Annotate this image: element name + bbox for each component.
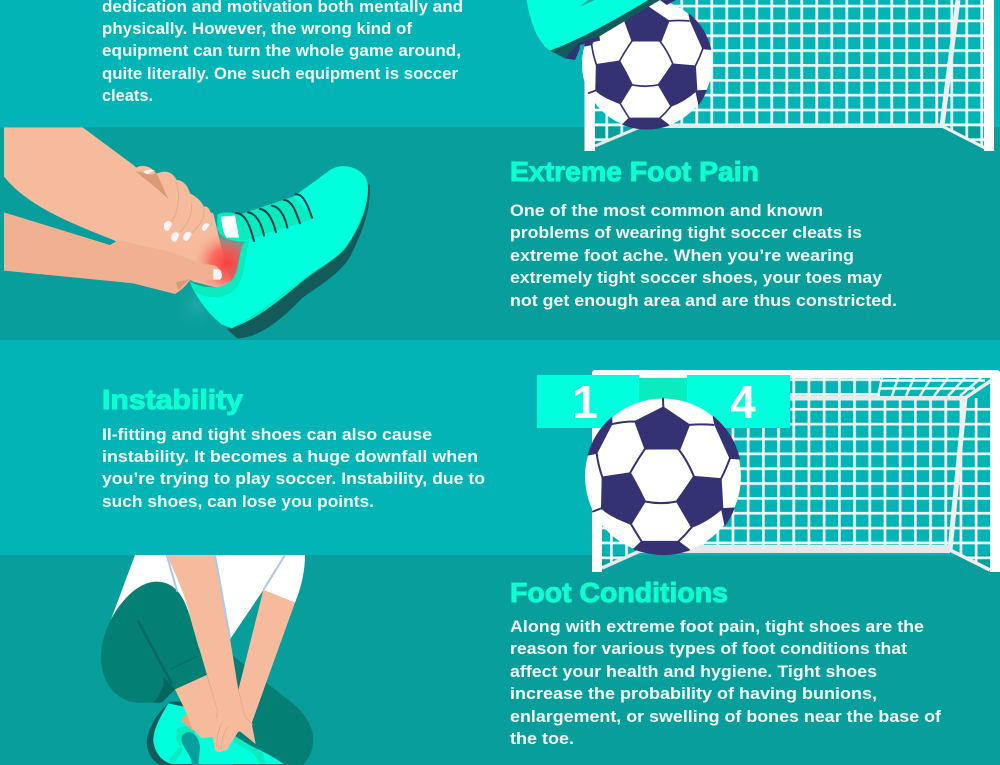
text block: instability: you’re trying to play soccer. Instability, due to [102,469,485,488]
icon: cleat kicking ball [527,0,676,60]
shoe body [189,166,368,328]
text block: extreme foot pain: not get enough area and are thus constricted. [510,291,897,310]
text block: instability: such shoes, can lose you points. [102,492,374,511]
scoreboard [537,375,790,428]
text block: extreme foot pain [510,201,897,310]
top hand fingers [155,172,212,240]
finger nails [164,221,172,231]
illustration: goal with net, middle [592,370,1000,572]
text block: intro paragraph: physically. However, the wrong kind of [102,19,412,38]
text block: foot conditions: reason for various types of foot conditions that [510,639,907,658]
text block: extreme foot pain: extremely tight soccer shoes, your toes may [510,268,883,287]
right arm [238,590,295,744]
front arm [4,212,220,294]
illustration: goal with net, top [584,0,994,151]
text block: foot conditions: increase the probability of having bunions, [510,684,877,703]
text block: intro paragraph: equipment can turn the whole game around, [102,41,461,60]
shirt [108,555,305,650]
text block: instability [102,425,485,511]
text block: foot conditions [510,617,941,748]
shoelaces [236,194,312,241]
text block: extreme foot pain: extreme foot ache. When you’re wearing [510,246,854,265]
illustration: crouching player holding foot [101,555,313,765]
foot [175,675,218,738]
shoe opening [182,732,200,765]
shirt sleeve lines [167,555,285,638]
pain glow [192,228,262,298]
text block: intro paragraph: cleats. [102,86,153,105]
right trousers leg [230,656,313,765]
heading: Extreme Foot Pain: Extreme Foot Pain [510,156,759,187]
shoe trim [233,735,265,764]
leg [4,127,233,292]
text block: extreme foot pain: problems of wearing tight soccer cleats is [510,223,862,242]
text block: foot conditions: Along with extreme foot pain, tight shoes are the [510,617,924,636]
shoe shadow [227,182,370,338]
text block: instability: instability. It becomes a huge downfall when [102,447,478,466]
panel: foot conditions band [0,555,1000,765]
heading: Instability: Instability [102,384,243,415]
text block: intro paragraph [102,0,463,105]
shoe outline [147,702,200,765]
shoe body [153,703,283,764]
scoreboard: 1 [572,376,598,428]
text block: instability: Il-fitting and tight shoes can also cause [102,425,432,444]
text block: intro paragraph: quite literally. One such equipment is soccer [102,64,458,83]
illustration: hands gripping foot in tight shoe [4,127,370,338]
panel: extreme foot pain band [0,127,1000,340]
left trousers leg [101,582,207,703]
text block: foot conditions: affect your health and hygiene. Tight shoes [510,662,877,681]
text block: extreme foot pain: One of the most common and known [510,201,823,220]
heading: Foot Conditions: Foot Conditions [510,577,728,608]
scoreboard: 4 [730,376,756,428]
text block: foot conditions: enlargement, or swelling of bones near the base of [510,707,941,726]
shoe trim [189,240,250,297]
left arm [167,555,247,752]
panel: intro band [0,0,1000,127]
text block: foot conditions: the toe. [510,729,574,748]
back hand [134,166,168,202]
icon: soccer ball, top [582,0,712,129]
ground glow [170,275,223,335]
icon: soccer ball, middle [585,399,741,554]
panel: instability band [0,340,1000,555]
